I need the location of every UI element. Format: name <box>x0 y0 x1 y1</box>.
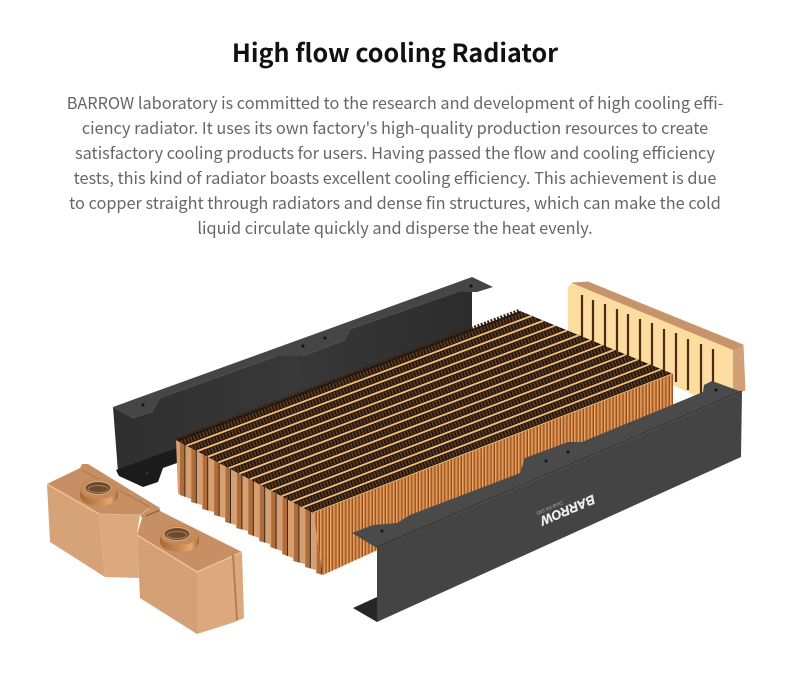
exploded radiator illustration <box>46 277 746 634</box>
description text: satisfactory cooling products for users. Having passed the flow and cooling efficiency <box>75 140 715 164</box>
description text: ciency radiator. It uses its own factory's high-quality production resources to create <box>82 115 708 139</box>
copper fin core <box>176 310 673 575</box>
title: High flow cooling Radiator <box>232 34 558 70</box>
back mounting bracket <box>113 277 493 487</box>
right copper end tank <box>137 510 244 634</box>
fin core right face <box>313 374 673 575</box>
description text <box>67 90 723 239</box>
description text: tests, this kind of radiator boasts excellent cooling efficiency. This achievement is due <box>74 165 716 189</box>
fin core top <box>176 310 673 513</box>
description text: to copper straight through radiators and dense fin structures, which can make the cold <box>69 190 721 214</box>
threaded port <box>160 525 199 552</box>
description text: liquid circulate quickly and disperse the heat evenly. <box>197 215 593 239</box>
threaded port <box>80 479 118 506</box>
front mounting bracket <box>352 381 742 622</box>
logo: BARROW: BARROW <box>537 492 597 529</box>
fin core left face <box>176 440 323 575</box>
left copper end tank <box>47 464 160 578</box>
description text: BARROW laboratory is committed to the research and development of high cooling effi- <box>67 90 723 114</box>
bracket front wall <box>377 392 742 622</box>
back copper end plate <box>568 282 745 398</box>
logo tagline: Dual-Kit-240 <box>535 499 563 516</box>
bracket top flange <box>352 381 742 548</box>
